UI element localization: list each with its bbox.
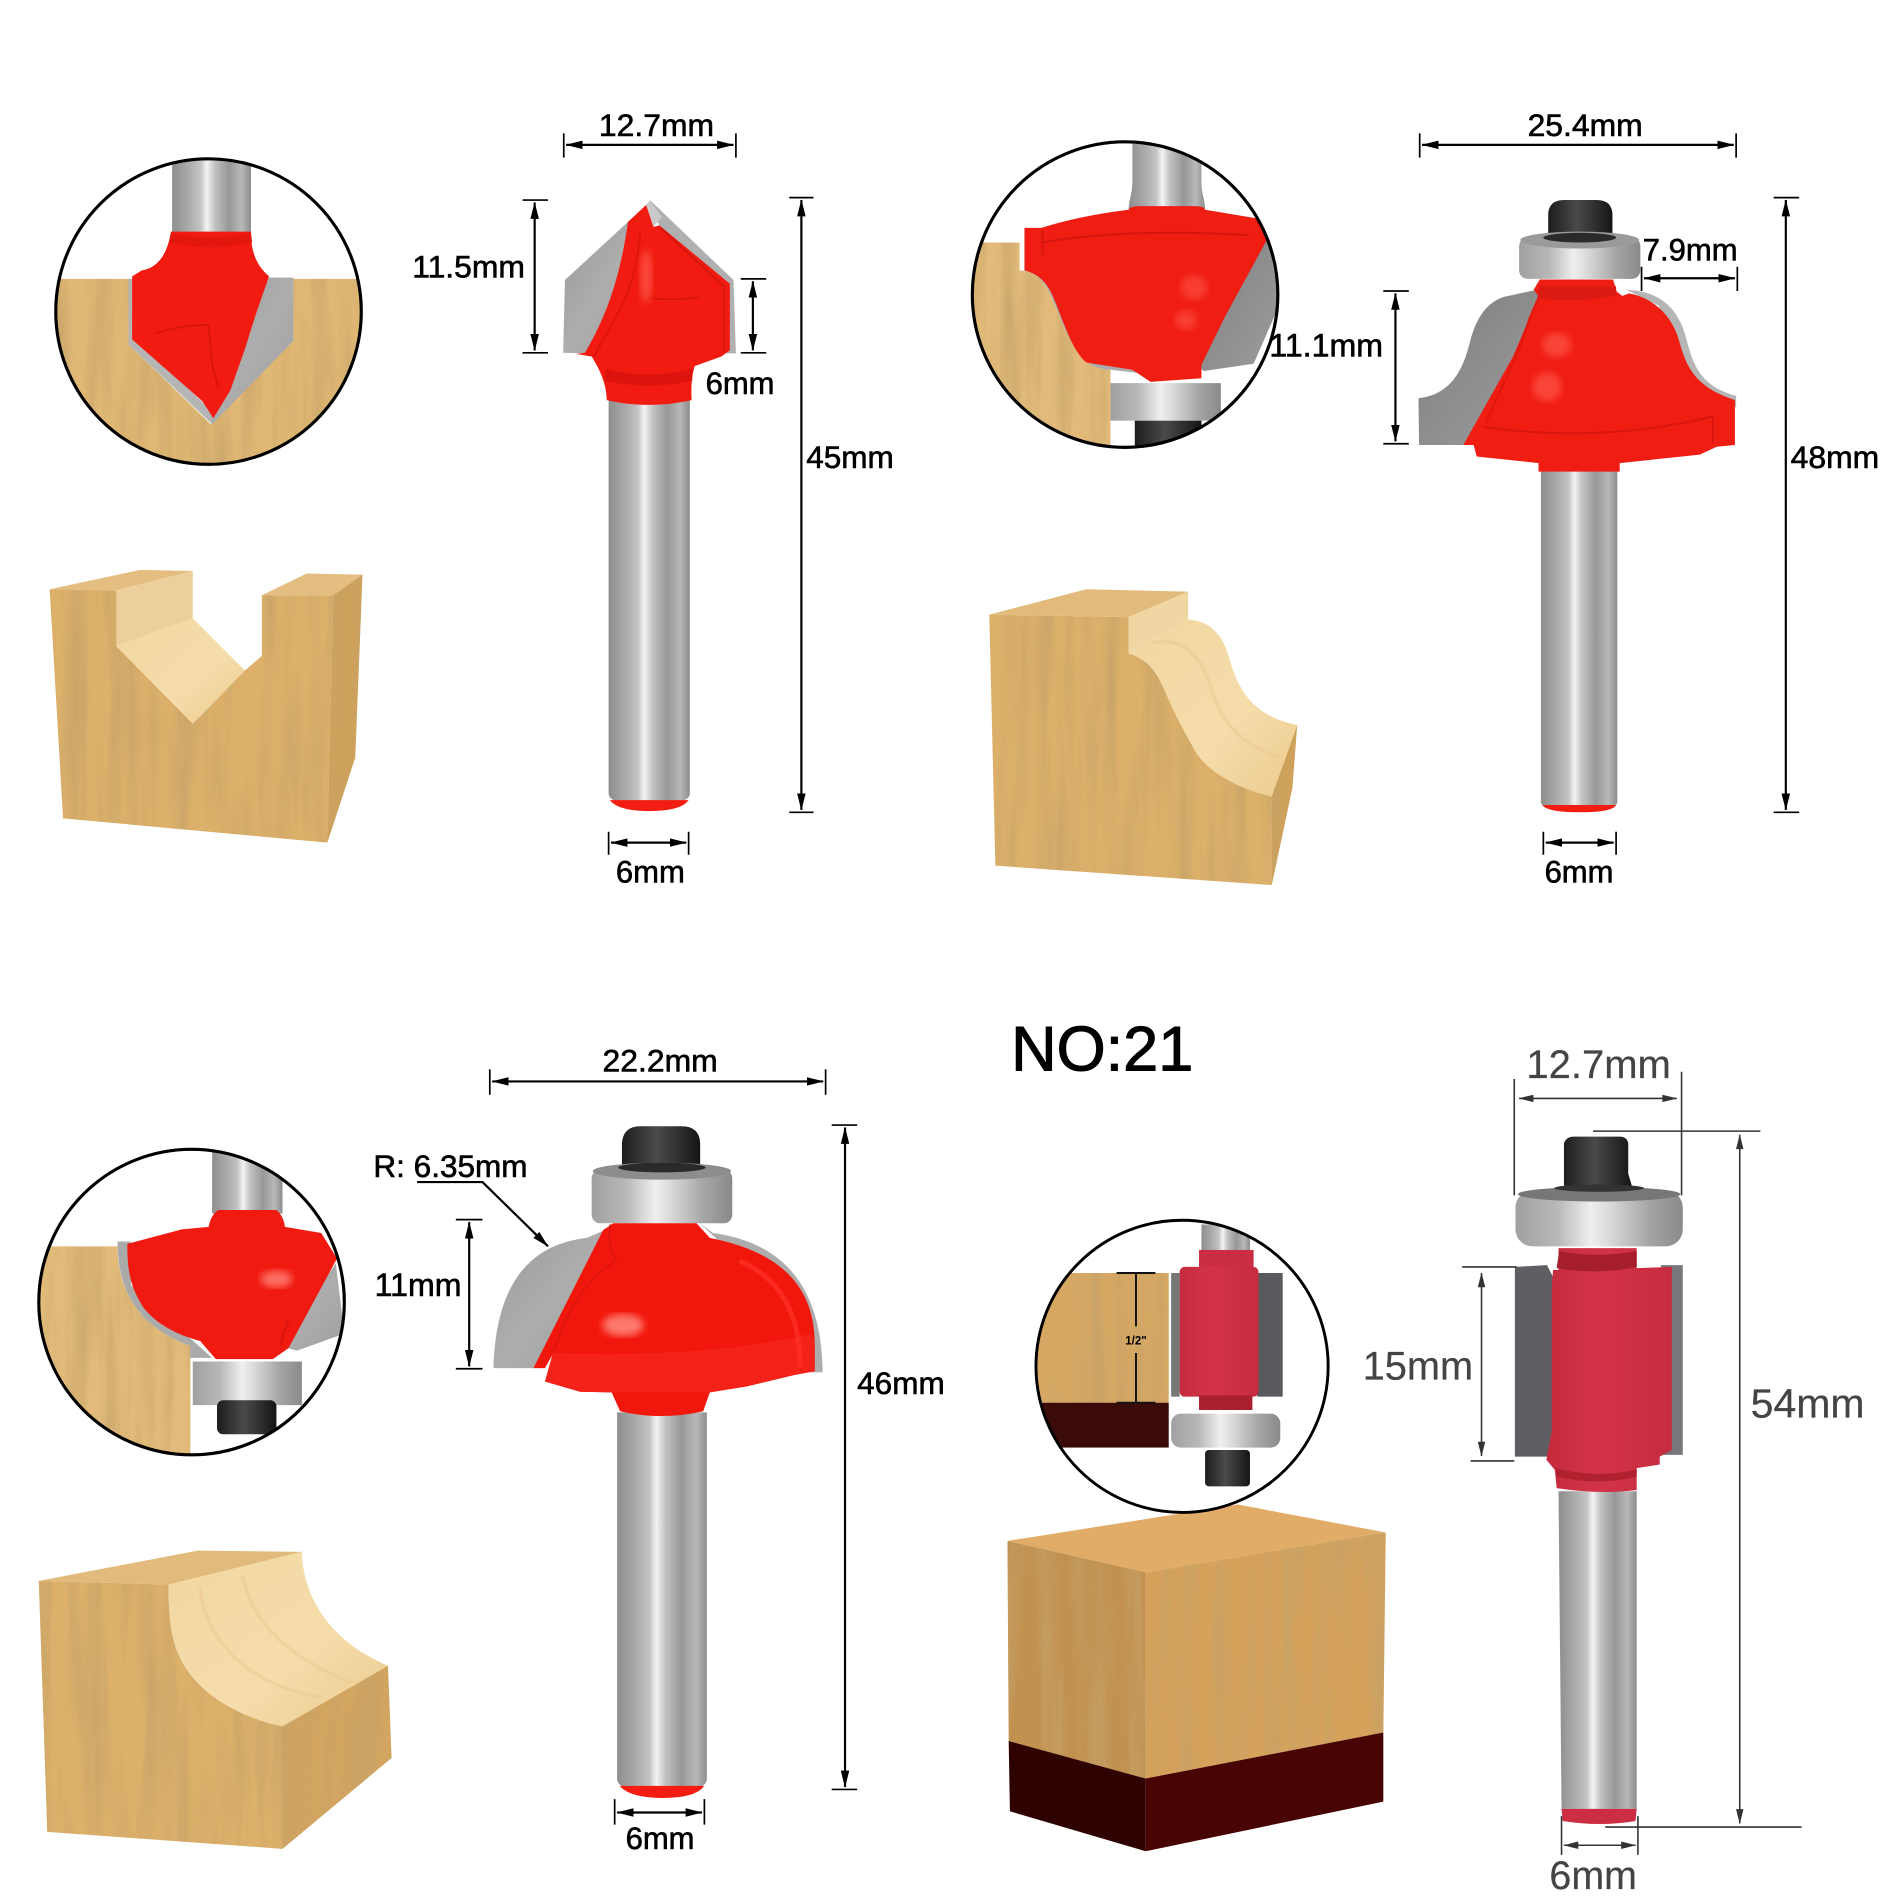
gray tip: [646, 200, 662, 227]
bearing: [1515, 1184, 1683, 1246]
wood block: V groove: [50, 570, 362, 843]
dimension 6mm shank: [615, 1799, 704, 1856]
panel: roman ogee bit: [965, 107, 1879, 890]
router bit: flush trim: [1363, 1043, 1864, 1898]
dimension 22.2mm: 22.2mm: [603, 1043, 718, 1079]
dimension 45mm: 45mm: [806, 439, 894, 475]
dimension 25.4mm: 25.4mm: [1528, 107, 1643, 143]
inset circle: cove profile cutting wood: [32, 1146, 344, 1461]
dimension 48mm: 48mm: [1791, 439, 1879, 475]
panel: NO:21 flush trim bit: [1007, 1015, 1864, 1898]
shank end cap: [610, 800, 689, 811]
dimension 6mm flute: 6mm: [706, 366, 775, 401]
dimension 6mm shank: 6mm: [626, 1821, 695, 1856]
dimension 46mm: [832, 1125, 945, 1789]
dimension 12.7mm: 12.7mm: [1526, 1043, 1671, 1087]
shank: [617, 1412, 707, 1787]
screw: [1548, 200, 1612, 235]
radius callout R: 6.35mm: R: 6.35mm: [373, 1148, 528, 1184]
inset circle: flush trim cutting: [1031, 1220, 1328, 1512]
panel: V-groove bit: [48, 107, 894, 890]
gray blade: [493, 1227, 612, 1368]
shank: [1541, 469, 1617, 806]
label 1/2 inch: 1/2": [1125, 1336, 1147, 1348]
dimension 45mm: [789, 198, 894, 812]
shank end cap: [1542, 805, 1616, 812]
gray blade: [1418, 289, 1552, 445]
dimension 6mm shank: [1543, 832, 1616, 890]
wood block with dark laminate: [1007, 1505, 1386, 1851]
dimension 15mm: 15mm: [1363, 1345, 1473, 1389]
bearing: [1519, 232, 1640, 279]
dimension 12.7mm: [1514, 1043, 1682, 1195]
shank end cap: [620, 1786, 704, 1798]
dimension 54mm: [1593, 1131, 1864, 1827]
dimension 7.9mm: [1642, 233, 1738, 291]
red cutter body: [1463, 279, 1735, 472]
dimension 11.1mm: [1269, 291, 1409, 444]
dimension 11.5mm: 11.5mm: [412, 249, 525, 285]
dimension 46mm: 46mm: [857, 1365, 945, 1401]
bearing: [592, 1163, 732, 1223]
gray cutting edges: [1515, 1265, 1558, 1457]
radius callout R: 6.35mm: [373, 1148, 548, 1246]
router bit: V-groove: [412, 107, 894, 890]
cut edge: [1022, 270, 1137, 373]
red cutter body: [533, 1223, 815, 1416]
dimension 12.7mm: [564, 107, 736, 158]
dimension 6mm shank: 6mm: [1545, 855, 1614, 890]
panel: cove bit: [32, 1043, 945, 1856]
title: NO:21: NO:21: [1011, 1015, 1193, 1085]
shank end cap: [1562, 1809, 1637, 1824]
inset circle: ogee profile cutting wood: [965, 133, 1280, 455]
dimension 11mm: 11mm: [375, 1267, 461, 1303]
router bit: ogee with bearing: [1269, 107, 1879, 890]
dimension 15mm: [1363, 1267, 1517, 1461]
wood block: ogee: [989, 589, 1297, 885]
dimension 7.9mm: 7.9mm: [1643, 233, 1738, 268]
gray blades: [563, 222, 643, 353]
screw: [622, 1126, 700, 1169]
shank: [1559, 1491, 1637, 1809]
dimension 11mm: [375, 1220, 483, 1369]
dimension 25.4mm: [1420, 107, 1736, 158]
dimension 12.7mm: 12.7mm: [599, 107, 714, 143]
dimension 6mm shank: [609, 832, 689, 890]
dimension 11.5mm: [412, 200, 548, 353]
red body: [576, 205, 730, 405]
router bit: cove with bearing: [373, 1043, 945, 1856]
dimension 6mm flute: [706, 279, 775, 401]
dimension 54mm: 54mm: [1751, 1380, 1864, 1426]
shank: [609, 400, 690, 801]
inset circle: V-groove cutting wood: [48, 152, 369, 473]
screw: [1564, 1137, 1632, 1186]
cut edge: [118, 1241, 212, 1358]
dimension 6mm shank: 6mm: [1549, 1854, 1637, 1898]
red cutter body: [1546, 1248, 1672, 1492]
dimension 48mm: [1774, 198, 1879, 812]
dimension 6mm shank: [1549, 1816, 1638, 1898]
dimension 6mm shank: 6mm: [616, 855, 685, 890]
dimension 22.2mm: [490, 1043, 826, 1095]
dimension 11.1mm: 11.1mm: [1269, 327, 1383, 363]
wood block: cove: [39, 1551, 392, 1849]
